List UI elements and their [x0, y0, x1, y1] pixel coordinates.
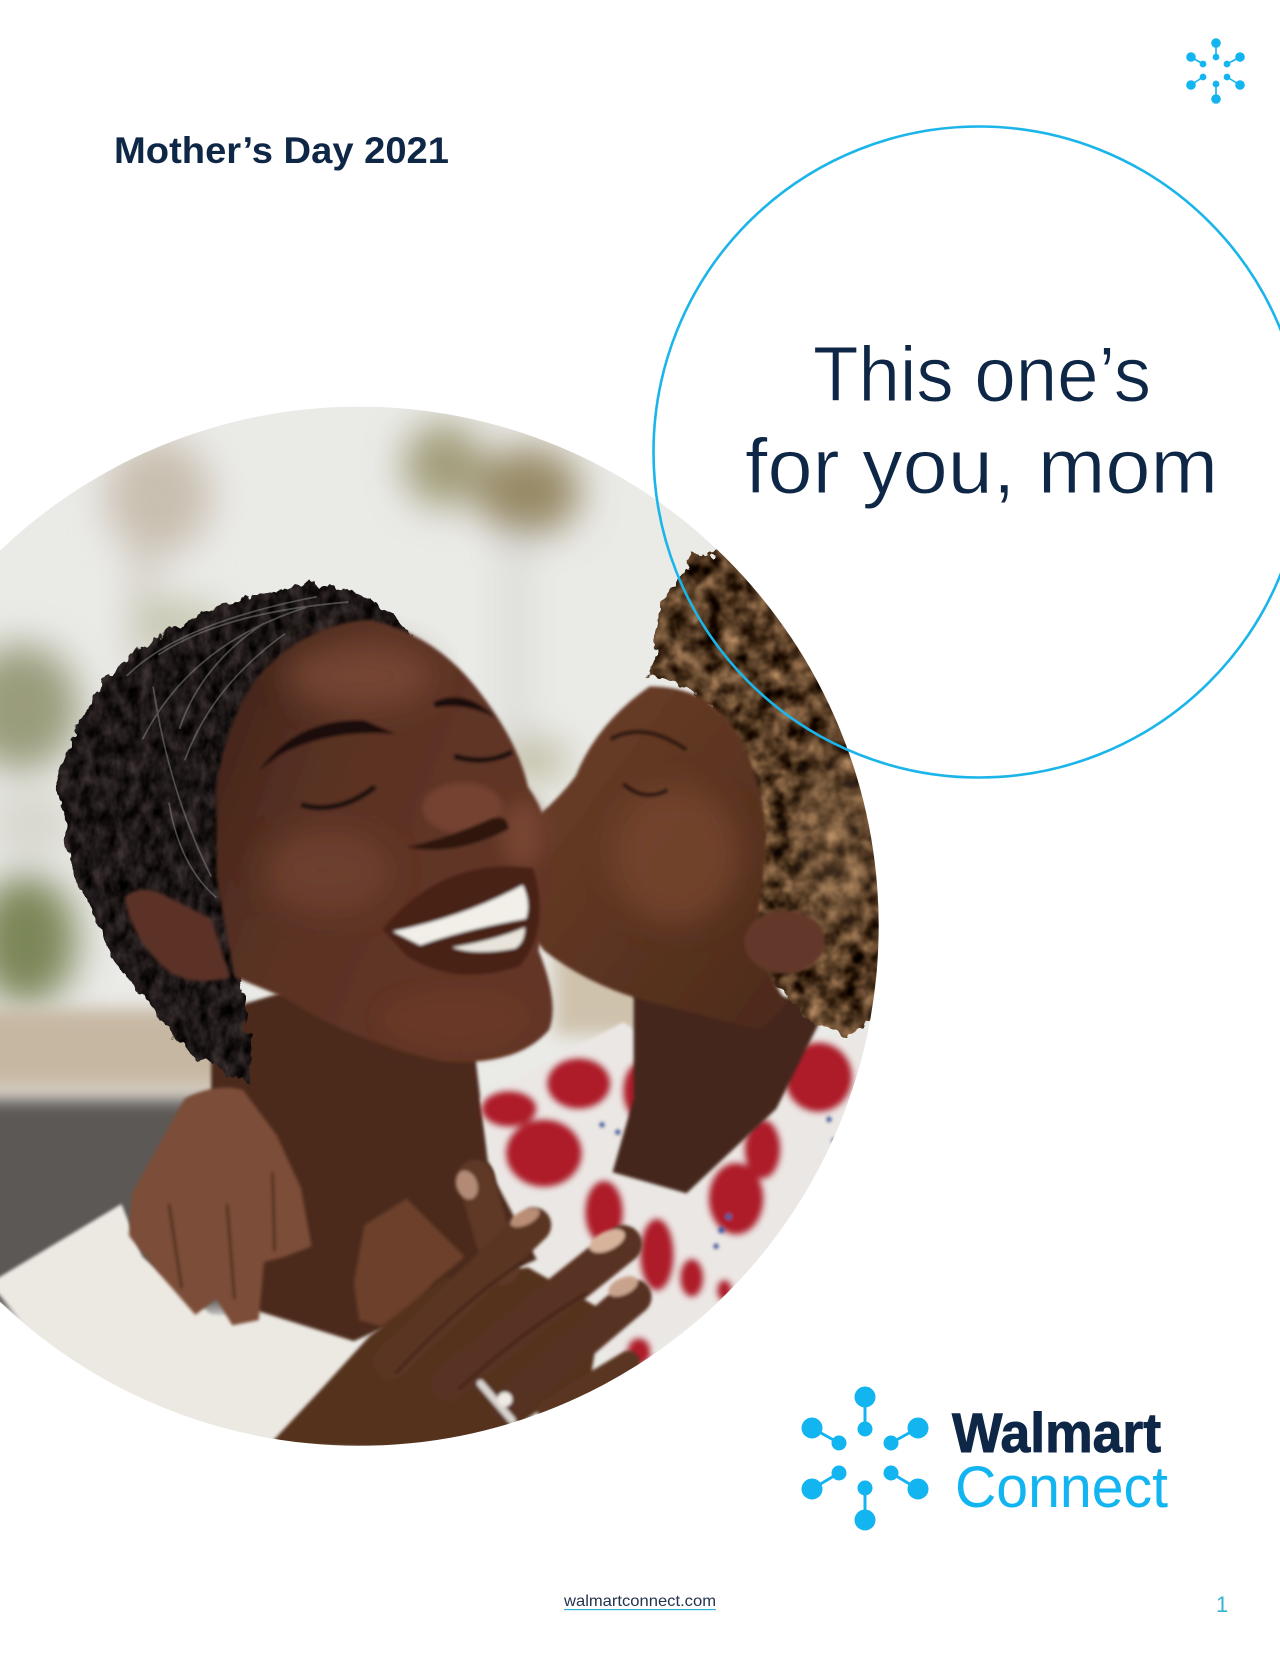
photo subject: mother's smile [382, 866, 540, 975]
page number: 1 [1216, 1592, 1228, 1617]
photo subject: daughter's dress [481, 1022, 871, 1368]
title: This one's for you, mom [745, 330, 1218, 510]
logo icon: spark [803, 1388, 927, 1529]
decorative blue circle outline [654, 126, 1280, 778]
photo subject: daughter's face [528, 686, 825, 1030]
title: This one's for you, mom: for you, mom [745, 422, 1218, 510]
photo subject: mother's ear [125, 890, 230, 981]
photo subject: daughter's curly hair [650, 554, 887, 1040]
photo: mother and daughter in circular crop [0, 401, 887, 1457]
photo subject: daughter's neck [613, 977, 829, 1193]
photo subject: mother's grey hair streaks [127, 597, 349, 898]
photo background: sky, palms and road [0, 401, 887, 1457]
logo wordmark: Walmart: Walmart [952, 1401, 1161, 1464]
logo wordmark: Connect: Connect [955, 1455, 1168, 1520]
photo subject: mother's hand with ring [269, 1167, 641, 1449]
photo subject: mother's hair [55, 583, 414, 1088]
logo: Walmart Connect [803, 1388, 1168, 1529]
photo subject: mother's face [125, 620, 553, 1062]
photo subject: daughter's fingers [354, 1199, 465, 1331]
photo subject: daughter's arm and hand on mother's shoulder [129, 1088, 312, 1325]
title: This one's for you, mom: This one’s [813, 330, 1151, 418]
icon: small Walmart Connect spark [1187, 39, 1244, 103]
photo subject: mother's neck [211, 982, 554, 1341]
footer link: walmartconnect.com: walmartconnect.com [563, 1593, 716, 1610]
photo subject: mother's white sweater [0, 1202, 230, 1324]
heading: Mother's Day 2021: Mother’s Day 2021 [114, 130, 449, 171]
